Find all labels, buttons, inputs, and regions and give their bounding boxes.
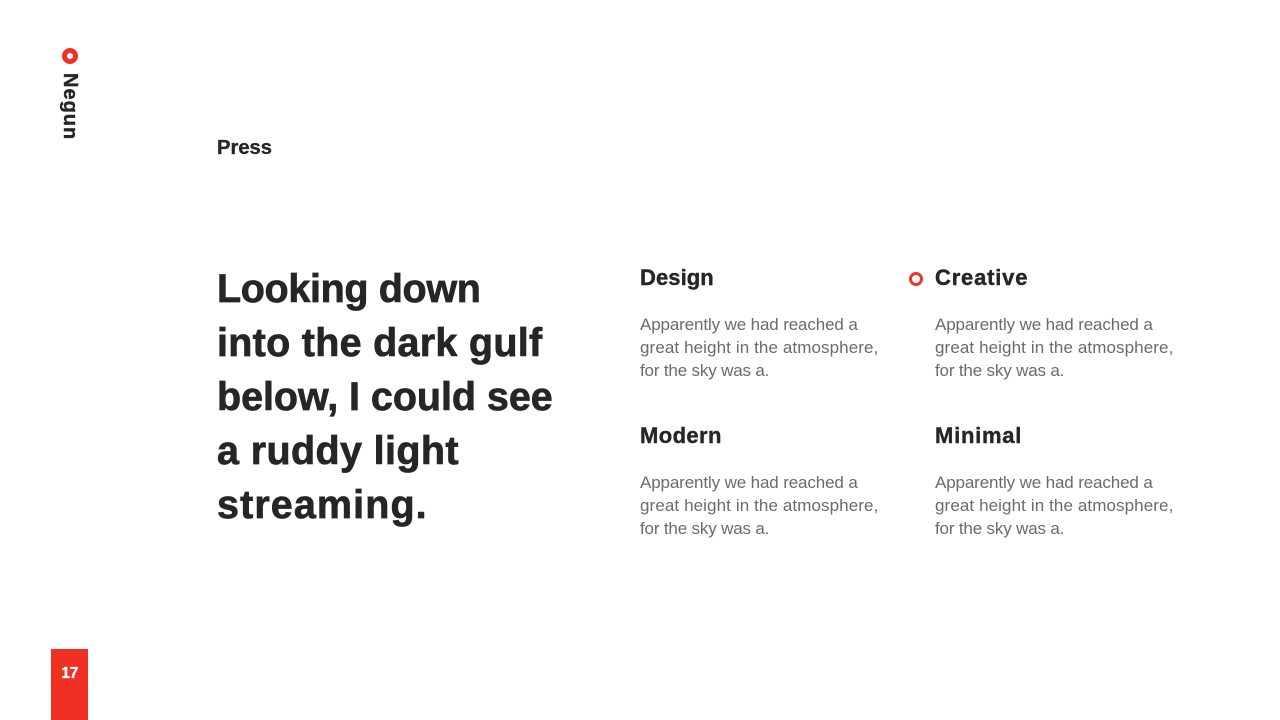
modern text	[640, 473, 878, 538]
section label: Press	[217, 137, 272, 159]
page number tab: 17	[61, 665, 78, 682]
icon: active marker	[909, 272, 923, 286]
item: minimal	[935, 423, 1173, 538]
main heading: Looking down	[217, 267, 480, 311]
page number tab	[51, 649, 88, 720]
main heading: a ruddy light	[217, 429, 459, 473]
creative text: for the sky was a.	[935, 361, 1064, 380]
design text: great height in the atmosphere,	[640, 338, 878, 357]
main heading: below, I could see	[217, 375, 553, 419]
modern text: Apparently we had reached a	[640, 473, 858, 492]
creative text: great height in the atmosphere,	[935, 338, 1173, 357]
design heading: Design	[640, 265, 714, 290]
design text: for the sky was a.	[640, 361, 769, 380]
modern heading: Modern	[640, 423, 722, 448]
item: creative	[935, 265, 1173, 380]
design text: Apparently we had reached a	[640, 315, 858, 334]
design text	[640, 315, 878, 380]
creative text: Apparently we had reached a	[935, 315, 1153, 334]
main heading: into the dark gulf	[217, 321, 542, 365]
item: design	[640, 265, 878, 380]
minimal text: great height in the atmosphere,	[935, 496, 1173, 515]
brand name: Negun	[58, 73, 80, 140]
minimal text: for the sky was a.	[935, 519, 1064, 538]
creative heading: Creative	[935, 265, 1028, 290]
minimal text: Apparently we had reached a	[935, 473, 1153, 492]
minimal text	[935, 473, 1173, 538]
modern text: great height in the atmosphere,	[640, 496, 878, 515]
brand logo dot	[62, 48, 78, 64]
minimal heading: Minimal	[935, 423, 1022, 448]
item: modern	[640, 423, 878, 538]
modern text: for the sky was a.	[640, 519, 769, 538]
main heading: streaming.	[217, 483, 428, 527]
creative text	[935, 315, 1173, 380]
main heading	[217, 267, 553, 527]
